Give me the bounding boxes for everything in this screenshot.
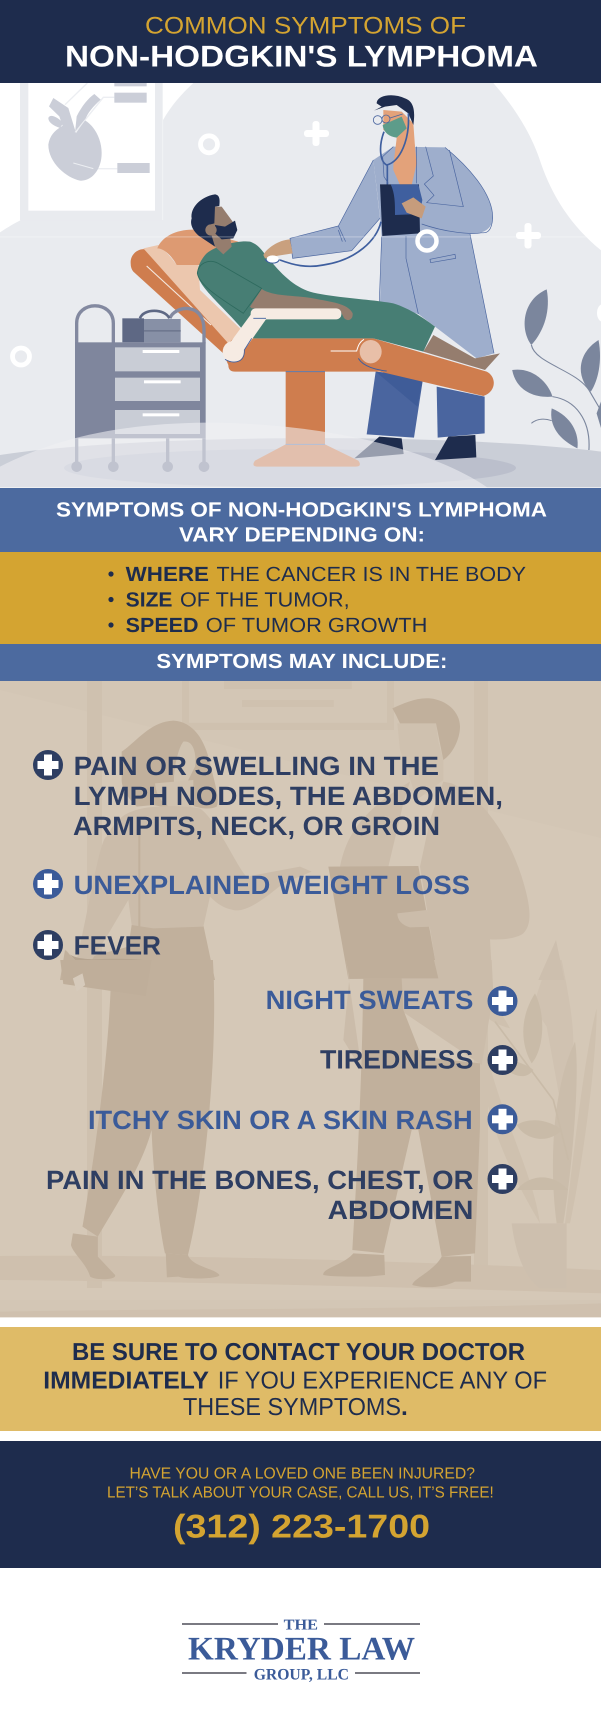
symptom: pain in bones: ABDOMEN bbox=[328, 1195, 473, 1225]
heading lines bbox=[56, 499, 547, 547]
symptom: fever bbox=[33, 930, 161, 961]
panel: gold factors list: SPEED bbox=[126, 614, 198, 637]
heading lines: VARY DEPENDING ON: bbox=[179, 524, 425, 547]
symptom: pain or swelling: PAIN OR SWELLING IN THE bbox=[74, 751, 439, 781]
callout: contact your doctor: IMMEDIATELY bbox=[43, 1367, 209, 1394]
panel: symptoms may include bbox=[0, 644, 601, 681]
title line 2: NON-HODGKIN'S LYMPHOMA bbox=[65, 41, 538, 74]
patient bbox=[191, 194, 500, 371]
callout: contact your doctor: THESE SYMPTOMS bbox=[183, 1394, 401, 1421]
panel: gold factors list: OF THE TUMOR, bbox=[180, 589, 350, 612]
floor shadow bbox=[64, 449, 516, 487]
callout: contact your doctor: . bbox=[401, 1394, 408, 1421]
panel: symptoms may include: SYMPTOMS MAY INCLUDE: bbox=[156, 650, 447, 673]
floor bbox=[0, 438, 601, 487]
panel: call to action: HAVE YOU OR A LOVED ONE BEEN INJURED? bbox=[130, 1466, 475, 1482]
title line 1: COMMON SYMPTOMS OF bbox=[145, 12, 466, 39]
logo: The Kryder Law Group: GROUP, LLC bbox=[254, 1666, 349, 1683]
symptom: pain or swelling bbox=[33, 750, 503, 841]
anatomy poster bbox=[20, 83, 163, 220]
decorative plus and ring icons bbox=[12, 121, 601, 365]
panel: gold factors list: WHERE bbox=[126, 563, 209, 586]
medical cart bbox=[71, 306, 209, 472]
floor highlight overlay bbox=[0, 423, 487, 487]
callout: contact your doctor bbox=[0, 1327, 601, 1431]
logo: The Kryder Law Group: THE bbox=[284, 1617, 318, 1633]
panel: vary depending on bbox=[0, 488, 601, 552]
callout: contact your doctor: BE SURE TO CONTACT YOUR DOCTOR bbox=[72, 1339, 525, 1366]
heading lines: SYMPTOMS OF NON-HODGKIN'S LYMPHOMA bbox=[56, 499, 547, 522]
symptom: tiredness: TIREDNESS bbox=[320, 1045, 473, 1075]
phone number: (312) 223-1700 bbox=[173, 1508, 430, 1545]
silhouette: man bbox=[323, 698, 564, 1287]
panel: gold factors list bbox=[0, 552, 601, 644]
symptom: pain in bones: PAIN IN THE BONES, CHEST, OR bbox=[46, 1165, 473, 1195]
symptom: night sweats: NIGHT SWEATS bbox=[266, 985, 473, 1015]
symptom: fever: FEVER bbox=[74, 931, 161, 961]
illustration: doctor examining patient bbox=[0, 83, 601, 487]
tan symptoms panel background bbox=[0, 681, 601, 1317]
panel: gold factors list: SIZE bbox=[126, 589, 172, 612]
silhouette: floor and plant bbox=[0, 1256, 601, 1317]
callout: contact your doctor: IF YOU EXPERIENCE ANY OF bbox=[218, 1367, 547, 1394]
symptom: weight loss: UNEXPLAINED WEIGHT LOSS bbox=[74, 870, 470, 900]
panel: call to action: LET’S TALK ABOUT YOUR CASE, CALL US, IT’S FREE! bbox=[107, 1484, 494, 1501]
logo: The Kryder Law Group bbox=[182, 1617, 420, 1683]
symptom: pain or swelling: ARMPITS, NECK, OR GROIN bbox=[73, 811, 440, 841]
symptom: pain or swelling: LYMPH NODES, THE ABDOMEN, bbox=[74, 781, 503, 811]
background blob bbox=[0, 83, 601, 487]
logo: The Kryder Law Group: KRYDER LAW bbox=[188, 1631, 415, 1667]
panel: gold factors list: THE CANCER IS IN THE BODY bbox=[216, 563, 526, 586]
plant leaves bbox=[512, 289, 601, 450]
panel: gold factors list: OF TUMOR GROWTH bbox=[206, 614, 427, 637]
silhouette: woman bbox=[60, 721, 312, 1279]
symptom: itchy skin: ITCHY SKIN OR A SKIN RASH bbox=[88, 1105, 473, 1135]
symptom: pain in bones bbox=[46, 1164, 518, 1225]
silhouette: plant bbox=[467, 960, 597, 1288]
panel: call to action bbox=[0, 1441, 601, 1568]
symptom list bbox=[33, 750, 518, 1225]
header bbox=[0, 0, 601, 83]
doctor bbox=[290, 95, 494, 460]
exam chair bbox=[131, 230, 494, 467]
